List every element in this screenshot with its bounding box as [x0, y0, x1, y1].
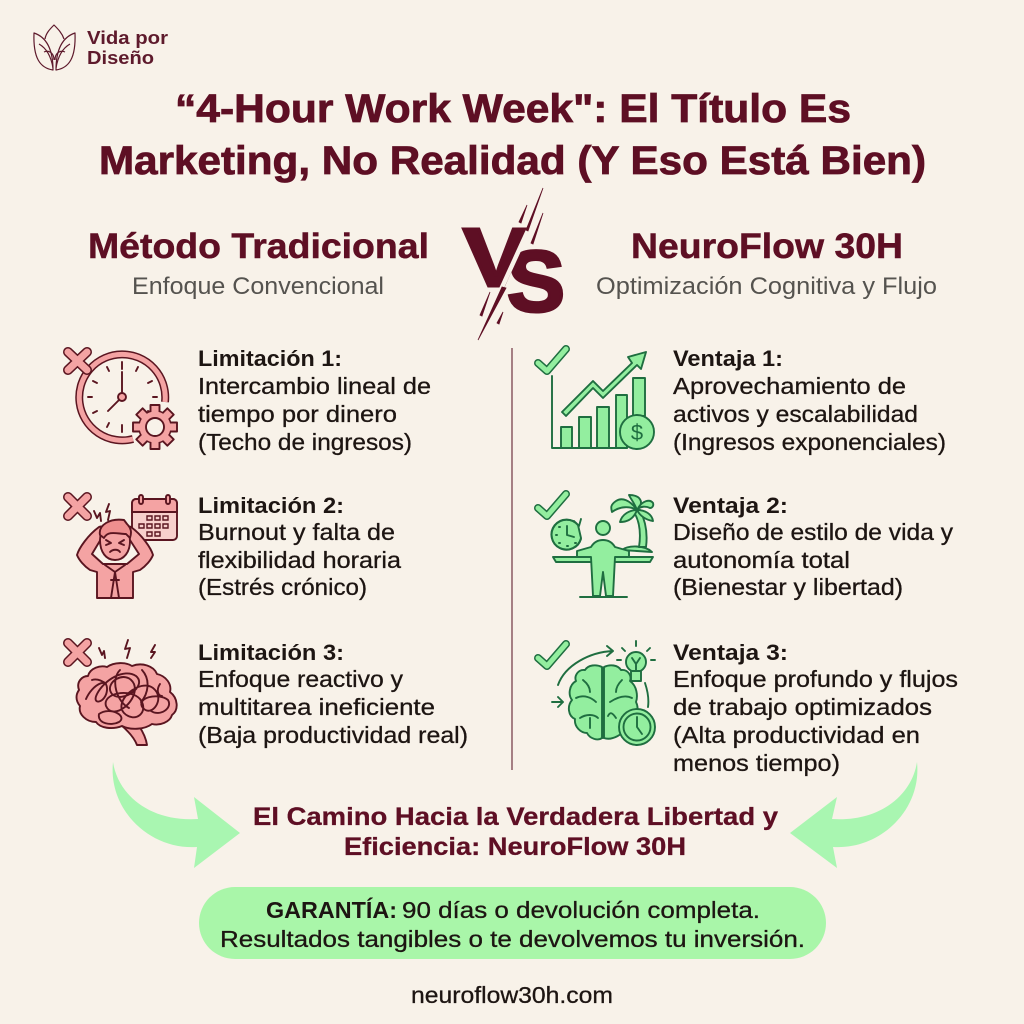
panel: advantage 3 — [538, 640, 958, 776]
text: advantage 1: activos y escalabilidad — [673, 401, 918, 427]
icon: lifestyle balance — [538, 494, 653, 597]
panel: limitation 2 — [68, 493, 401, 600]
text: advantage 1: Aprovechamiento de — [673, 373, 906, 399]
footer url: neuroflow30h.com — [411, 982, 613, 1008]
icon: growth chart with coin — [538, 349, 654, 449]
text: limitation 1: tiempo por dinero — [198, 401, 397, 427]
VS emblem — [463, 188, 565, 340]
text: limitation 3: (Baja productividad real) — [198, 722, 468, 748]
panel: advantage 1 — [538, 346, 946, 455]
panel: limitation 3 — [68, 640, 468, 748]
guarantee pill: 90 días o devolución completa. — [402, 897, 760, 923]
text: advantage 2: Ventaja 2: — [673, 493, 788, 518]
text: advantage 3: Ventaja 3: — [673, 640, 788, 665]
text: limitation 3: multitarea ineficiente — [198, 694, 435, 720]
text: advantage 3: menos tiempo) — [673, 750, 840, 776]
text: limitation 2: flexibilidad horaria — [198, 547, 401, 573]
heading: NeuroFlow 30H: NeuroFlow 30H — [631, 227, 903, 266]
icon: brain with bulb and clock — [538, 641, 655, 745]
text: limitation 1: Intercambio lineal de — [198, 373, 431, 399]
icon: tangled brain — [68, 640, 177, 745]
text: limitation 2: Burnout y falta de — [198, 519, 395, 545]
text: limitation 3 — [198, 640, 468, 748]
VS emblem: V — [463, 211, 529, 304]
logo: Vida por Diseño: Vida por — [87, 28, 168, 48]
text: advantage 3: Enfoque profundo y flujos — [673, 666, 958, 692]
heading: NeuroFlow 30H — [596, 227, 937, 300]
text: limitation 3: Enfoque reactivo y — [198, 666, 404, 692]
text: advantage 2: Diseño de estilo de vida y — [673, 519, 954, 545]
text: advantage 3: (Alta productividad en — [673, 722, 920, 748]
text: advantage 2 — [673, 493, 954, 600]
text: limitation 1: Limitación 1: — [198, 346, 342, 371]
text: limitation 1 — [198, 346, 431, 455]
guarantee pill — [199, 887, 826, 959]
VS emblem: S — [507, 234, 565, 330]
text: advantage 3 — [673, 640, 958, 776]
icon: growth chart with coin: $ — [631, 420, 643, 445]
panel: advantage 2 — [538, 493, 954, 600]
title — [99, 87, 926, 183]
logo: Vida por Diseño — [34, 25, 168, 70]
guarantee pill: GARANTÍA: — [266, 896, 397, 923]
call to action: Eficiencia: NeuroFlow 30H — [344, 833, 686, 861]
text: advantage 3: de trabajo optimizados — [673, 694, 932, 720]
heading: Método Tradicional: Método Tradicional — [88, 227, 429, 266]
text: limitation 1: (Techo de ingresos) — [198, 429, 412, 455]
text: advantage 2: autonomía total — [673, 547, 850, 573]
text: limitation 2: Limitación 2: — [198, 493, 344, 518]
text: limitation 2: (Estrés crónico) — [198, 574, 367, 600]
icon: stressed person with calendar — [68, 495, 177, 598]
text: advantage 1: (Ingresos exponenciales) — [673, 429, 946, 455]
text: advantage 2: (Bienestar y libertad) — [673, 574, 903, 600]
title: Marketing, No Realidad (Y Eso Está Bien) — [99, 139, 926, 183]
title: “4-Hour Work Week": El Título Es — [175, 87, 851, 131]
guarantee pill: Resultados tangibles o te devolvemos tu inversión. — [220, 926, 805, 952]
logo: Vida por Diseño: Diseño — [87, 48, 154, 68]
divider — [511, 348, 513, 770]
text: limitation 2 — [198, 493, 401, 600]
panel: limitation 1 — [68, 346, 431, 455]
call to action: El Camino Hacia la Verdadera Libertad y — [253, 803, 778, 831]
heading: NeuroFlow 30H: Optimización Cognitiva y Flujo — [596, 273, 937, 300]
text: advantage 1: Ventaja 1: — [673, 346, 783, 371]
icon: clock with gear — [68, 352, 177, 449]
arrow: right — [790, 762, 917, 868]
arrow: left — [113, 762, 240, 868]
text: advantage 1 — [673, 346, 946, 455]
call to action — [253, 803, 778, 861]
heading: Método Tradicional: Enfoque Convencional — [132, 273, 384, 300]
heading: Método Tradicional — [88, 227, 429, 300]
text: limitation 3: Limitación 3: — [198, 640, 344, 665]
